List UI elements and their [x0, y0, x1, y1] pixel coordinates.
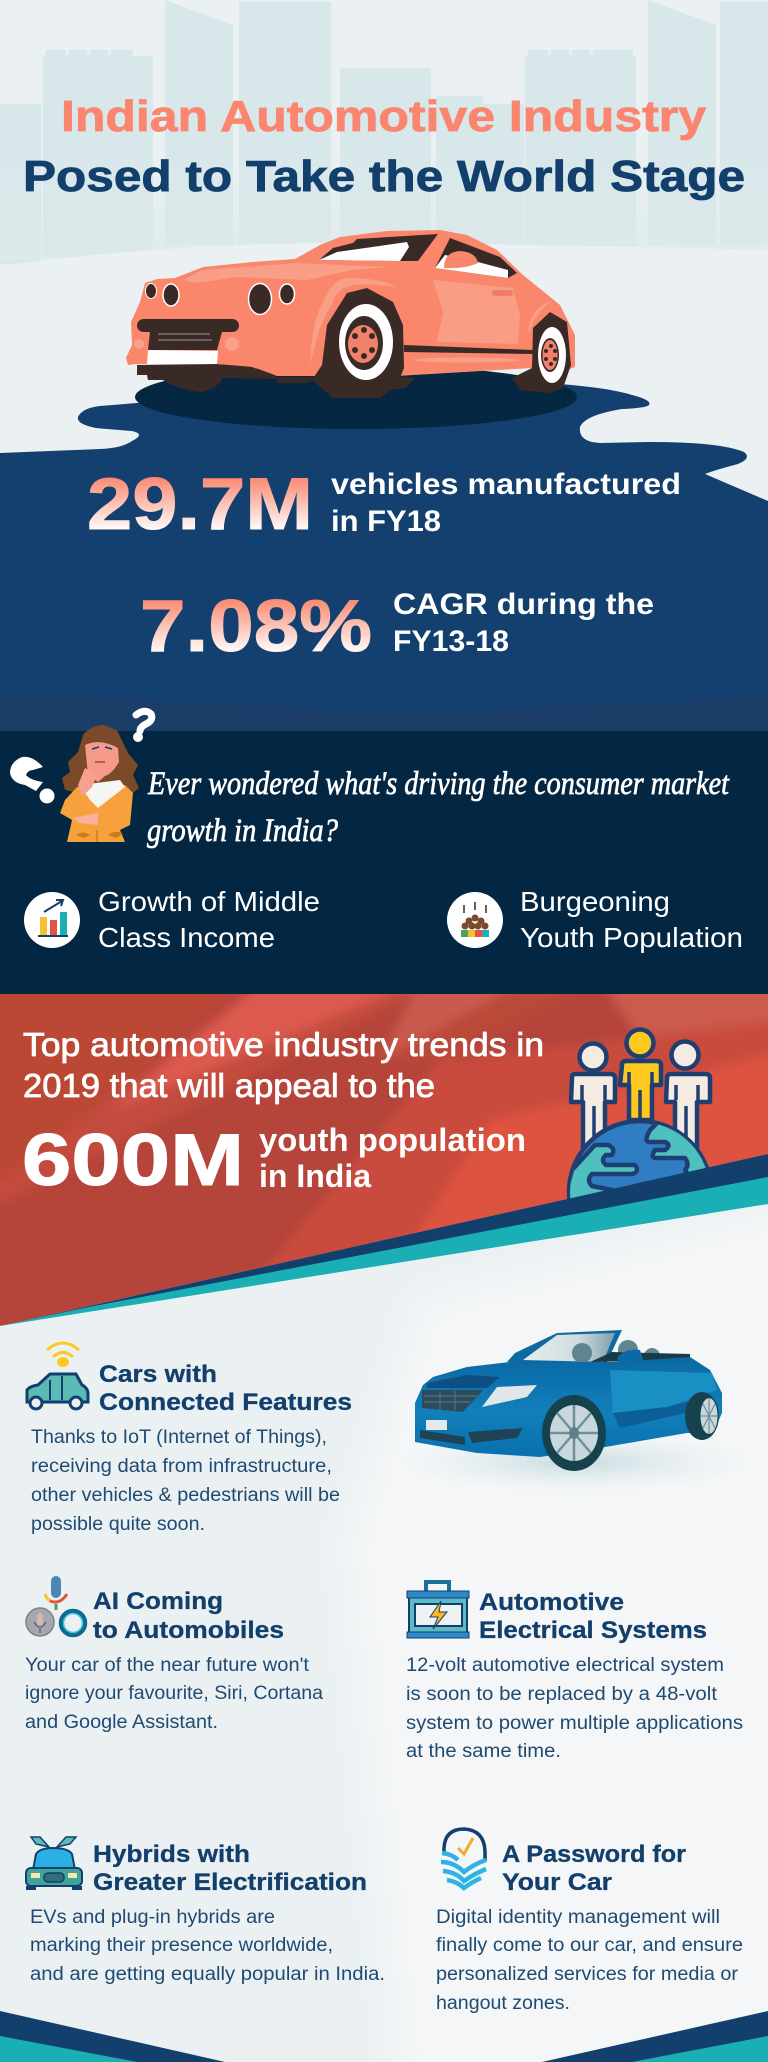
icon: voice assistants	[26, 1576, 85, 1636]
text: growth of middle class	[98, 886, 320, 953]
stat: 29.7M vehicles	[87, 464, 681, 545]
block: AI: to Automobiles	[93, 1617, 284, 1644]
block: password: hangout zones.	[436, 1993, 570, 2014]
hood highlight	[183, 263, 387, 283]
text: growth of middle class: Growth of Middle	[98, 886, 320, 917]
body	[415, 1357, 722, 1457]
text: youth population: Burgeoning	[520, 886, 670, 917]
plate and intakes	[426, 1420, 447, 1430]
undercarriage	[137, 364, 317, 392]
navy splash panel	[0, 384, 768, 731]
haze band	[0, 150, 768, 260]
block: password: finally come to our car, and ensure	[436, 1935, 743, 1956]
car body	[126, 230, 575, 376]
lower wave band	[0, 695, 768, 731]
lower panel: pale background	[0, 1200, 768, 2062]
stat: 600M youth: in India	[259, 1158, 371, 1194]
trends heading	[23, 1027, 544, 1105]
headlight	[482, 1385, 537, 1407]
stat: 7.08% CAGR: 7.08%	[140, 586, 372, 667]
block: AI	[25, 1588, 323, 1733]
text: growth of middle class: Class Income	[98, 922, 275, 953]
block: electrical systems: is soon to be replaced by a 48-volt	[406, 1684, 718, 1705]
stat: 7.08% CAGR: CAGR during the	[393, 588, 654, 621]
center person	[626, 1030, 654, 1056]
block: electrical systems: Electrical Systems	[479, 1617, 707, 1644]
hand	[78, 768, 97, 797]
question heading	[147, 766, 730, 849]
stat: 7.08% CAGR: FY13-18	[393, 625, 509, 658]
hair	[62, 725, 139, 793]
block: connected features: possible quite soon.	[31, 1514, 205, 1535]
block: hybrids: marking their presence worldwide,	[30, 1935, 333, 1956]
title: Indian Automotive Industry	[61, 92, 707, 141]
block: connected features: Connected Features	[99, 1389, 352, 1416]
front wheel	[312, 288, 404, 398]
illustration: orange car	[126, 230, 575, 398]
collar	[80, 780, 125, 808]
text: youth population	[520, 886, 743, 953]
block: connected features: other vehicles & pedestrians will be	[31, 1485, 340, 1506]
rear highlight	[528, 300, 555, 332]
stat: 600M youth	[22, 1120, 526, 1201]
illustration: blue convertible	[400, 1330, 750, 1492]
icon: growth chart	[24, 892, 80, 948]
icon: youth crowd	[447, 892, 503, 948]
block: connected features	[31, 1361, 352, 1535]
bottom corner accents	[0, 2011, 768, 2062]
text: youth population: Youth Population	[520, 922, 743, 953]
right person	[672, 1042, 698, 1068]
windshield frame	[507, 1330, 622, 1362]
skyline backdrop	[0, 0, 768, 264]
mirror	[617, 1350, 644, 1366]
stat: 7.08% CAGR	[140, 586, 654, 667]
icon: connected car	[27, 1343, 88, 1409]
block: electrical systems: at the same time.	[406, 1741, 561, 1762]
icon: people on globe	[566, 1027, 712, 1234]
block: password: Your Car	[502, 1869, 612, 1896]
car shadow	[135, 365, 577, 429]
side sill	[404, 345, 533, 354]
face	[85, 742, 119, 782]
block: connected features: receiving data from infrastructure,	[31, 1456, 332, 1477]
panel: red trends banner	[0, 994, 768, 1326]
stat: 600M youth: 600M	[22, 1120, 244, 1201]
hood shade	[427, 1375, 500, 1388]
block: hybrids: and are getting equally popular in India.	[30, 1964, 385, 1985]
stat: 600M youth: youth population	[259, 1122, 526, 1158]
block: password: A Password for	[502, 1841, 686, 1868]
stat: 29.7M vehicles: 29.7M	[87, 464, 313, 545]
question heading: growth in India?	[147, 813, 338, 849]
windshield glass	[523, 1333, 615, 1362]
icon: fingerprint check	[441, 1829, 486, 1888]
windshield	[319, 234, 438, 261]
block: password	[436, 1841, 743, 2014]
question marks	[136, 711, 152, 731]
seats	[572, 1343, 592, 1363]
block: password: personalized services for media or	[436, 1964, 739, 1985]
block: hybrids: Greater Electrification	[93, 1869, 367, 1896]
icon: battery	[407, 1582, 469, 1638]
block: connected features: Thanks to IoT (Internet of Things),	[31, 1427, 327, 1448]
door panel	[433, 280, 520, 344]
door panel	[610, 1370, 717, 1413]
side window	[435, 238, 517, 278]
block: electrical systems: Automotive	[479, 1589, 624, 1616]
block: hybrids: EVs and plug-in hybrids are	[30, 1907, 275, 1928]
rear wheel	[512, 312, 571, 393]
block: AI: and Google Assistant.	[25, 1712, 218, 1733]
stat: 29.7M vehicles: vehicles manufactured	[331, 468, 681, 501]
globe	[569, 1121, 711, 1263]
front wheel	[542, 1395, 606, 1471]
ground hill	[0, 243, 768, 460]
block: electrical systems: system to power multiple applications	[406, 1713, 743, 1734]
icon: hybrid car	[26, 1837, 82, 1890]
trends heading: Top automotive industry trends in	[23, 1027, 544, 1064]
block: electrical systems: 12-volt automotive electrical system	[406, 1655, 724, 1676]
block: electrical systems	[406, 1589, 743, 1762]
body	[60, 785, 133, 842]
bumper and grill	[137, 319, 239, 332]
block: connected features: Cars with	[99, 1361, 217, 1388]
block: AI: Your car of the near future won't	[25, 1655, 310, 1676]
rear wheel	[685, 1392, 719, 1440]
panel: consumer market	[0, 731, 768, 994]
fender highlight	[310, 278, 397, 365]
left person	[580, 1044, 606, 1070]
title: Posed to Take the World Stage	[23, 152, 745, 201]
illustration: thinking woman	[10, 711, 152, 842]
block: hybrids	[30, 1841, 385, 1985]
block: AI: AI Coming	[93, 1588, 223, 1615]
title	[23, 92, 745, 201]
diagonal stripes	[0, 1154, 768, 1326]
block: AI: ignore your favourite, Siri, Cortana	[25, 1683, 323, 1704]
block: password: Digital identity management will	[436, 1907, 720, 1928]
block: hybrids: Hybrids with	[93, 1841, 250, 1868]
grill	[422, 1390, 483, 1412]
trends heading: 2019 that will appeal to the	[23, 1068, 435, 1105]
stat: 29.7M vehicles: in FY18	[331, 505, 441, 538]
headlights	[146, 284, 156, 298]
